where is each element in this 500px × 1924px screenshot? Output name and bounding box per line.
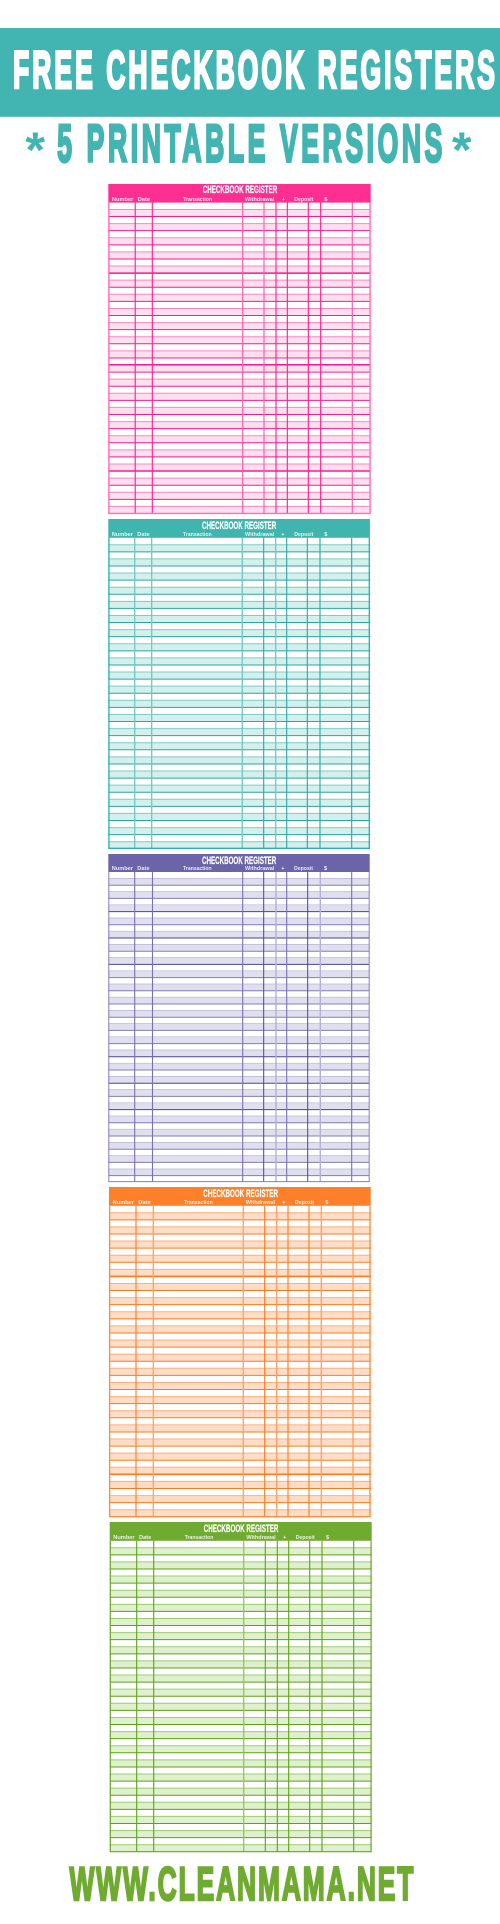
column labels: Transaction: [184, 1200, 213, 1206]
panel: orange checkbook register: [109, 1187, 371, 1517]
column labels: [112, 866, 328, 872]
column labels: [113, 1200, 329, 1206]
ledger rows: [109, 1206, 371, 1517]
column labels: Transaction: [183, 532, 212, 538]
footer url: WWW.CLEANMAMA.NET: [70, 1859, 413, 1911]
icon: right asterisk: *: [452, 122, 472, 178]
column labels: Deposit: [295, 1200, 314, 1206]
column labels: Number: [113, 1535, 135, 1541]
ledger rows: [108, 872, 369, 1182]
column labels: [112, 197, 328, 203]
column labels: $: [324, 532, 328, 538]
heading: CHECKBOOK REGISTER: [202, 855, 276, 867]
column labels: Transaction: [183, 197, 213, 203]
column labels: Date: [137, 532, 150, 538]
column labels: [113, 1535, 330, 1541]
header bar: [108, 854, 370, 872]
column labels: Deposit: [294, 866, 313, 872]
column labels: Deposit: [294, 197, 313, 203]
ledger rows: [108, 202, 370, 513]
column labels: Number: [112, 866, 134, 872]
panel: purple checkbook register: [108, 854, 370, 1182]
header bar: [109, 1187, 371, 1206]
column labels: Withdrawal: [246, 1535, 276, 1541]
title banner: [0, 28, 500, 117]
icon: left asterisk: *: [26, 122, 46, 178]
subtitle: 5 printable versions: [26, 114, 472, 178]
column labels: $: [324, 197, 328, 203]
column labels: Date: [137, 866, 150, 872]
column labels: $: [325, 1200, 329, 1206]
column labels: Date: [139, 1535, 151, 1541]
header bar: [108, 184, 371, 203]
heading: CHECKBOOK REGISTER: [203, 184, 277, 196]
column labels: Deposit: [294, 532, 313, 538]
title: free checkbook registers: FREE CHECKBOOK REGISTERS: [13, 40, 495, 100]
column labels: +: [283, 1535, 287, 1541]
panel: green checkbook register: [110, 1522, 372, 1852]
ledger rows: [108, 538, 370, 849]
column labels: Number: [112, 197, 134, 203]
column labels: Transaction: [183, 866, 212, 872]
header bar: [110, 1522, 372, 1541]
subtitle text: 5 PRINTABLE VERSIONS: [57, 114, 442, 173]
column labels: Date: [138, 197, 150, 203]
column labels: Number: [112, 532, 134, 538]
column labels: Withdrawal: [245, 866, 275, 872]
column labels: Date: [138, 1200, 151, 1206]
column labels: +: [281, 532, 285, 538]
column labels: +: [282, 197, 286, 203]
panel: pink checkbook register: [108, 184, 371, 513]
column labels: Deposit: [296, 1535, 315, 1541]
column labels: Transaction: [185, 1535, 214, 1541]
heading: CHECKBOOK REGISTER: [203, 1188, 278, 1200]
column labels: $: [324, 866, 328, 872]
heading: CHECKBOOK REGISTER: [202, 520, 276, 532]
column labels: Withdrawal: [245, 532, 275, 538]
column labels: +: [282, 1200, 286, 1206]
ledger rows: [110, 1541, 372, 1852]
column labels: +: [281, 866, 285, 872]
column labels: Number: [113, 1200, 135, 1206]
column labels: Withdrawal: [245, 197, 275, 203]
column labels: [112, 532, 328, 538]
column labels: Withdrawal: [246, 1200, 275, 1206]
header bar: [108, 519, 370, 538]
panel: teal checkbook register: [108, 519, 370, 849]
column labels: $: [326, 1535, 330, 1541]
heading: CHECKBOOK REGISTER: [204, 1523, 278, 1535]
